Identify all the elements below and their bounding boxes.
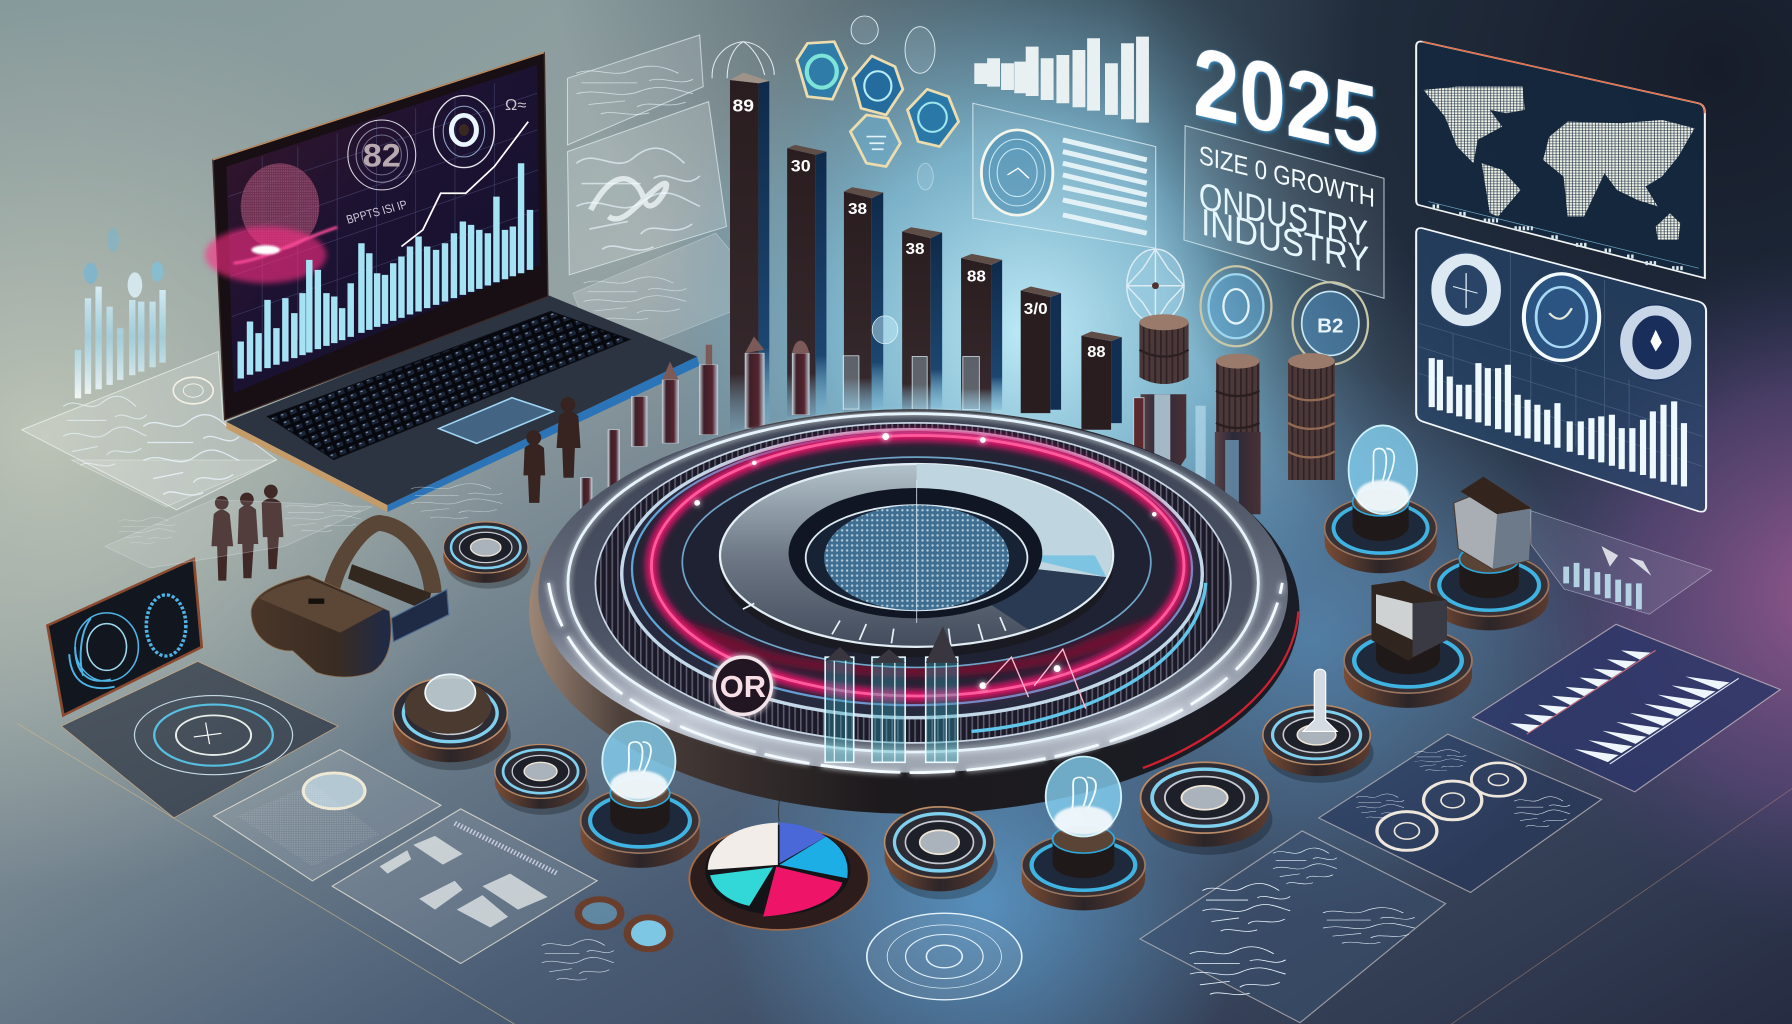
pie chart <box>689 786 869 930</box>
glass legend panel <box>973 103 1156 248</box>
handwritten note <box>542 940 614 980</box>
caption line 2: ONDUSTRY <box>1199 174 1368 256</box>
laptop dial number: 82 <box>363 139 401 174</box>
extra vials by the people <box>581 430 619 533</box>
rim highlights <box>549 583 1282 773</box>
bar 6 <box>1021 287 1061 413</box>
spiked chart sheet <box>1473 624 1780 792</box>
pie slice pink <box>763 867 842 917</box>
donut 2 <box>1524 274 1599 360</box>
mini bar chart top <box>981 37 1142 123</box>
rear stacks and dials <box>1127 249 1368 514</box>
dashboard panel <box>1416 228 1706 512</box>
disc tick marks <box>743 603 1006 646</box>
bar 4: 38 <box>905 239 925 258</box>
pie slice teal <box>710 867 773 906</box>
VR headset <box>251 523 449 677</box>
sketch sheet <box>1140 831 1446 1023</box>
globe pedestal centre <box>1022 757 1145 910</box>
pie slice cyan <box>779 837 848 878</box>
caption panel <box>1184 126 1384 298</box>
red base edge <box>1143 611 1298 768</box>
bar 3: 38 <box>848 199 867 218</box>
dashboard bars <box>1432 358 1684 486</box>
box pedestal lower <box>1344 581 1472 708</box>
disc light sector <box>917 464 1112 577</box>
pie slice blue <box>779 823 826 863</box>
platform base <box>529 409 1299 814</box>
donut 1 <box>1431 252 1501 328</box>
coin icon right 1 <box>1141 762 1272 855</box>
hexagon badge 4 <box>850 115 900 167</box>
coin stack 3 <box>1288 353 1335 480</box>
caption line 3: INDUSTRY <box>1201 201 1369 282</box>
grey disc side <box>720 474 1113 657</box>
lens rings <box>578 899 670 949</box>
laptop logo: Ω≈ <box>505 97 527 114</box>
floor sheets left <box>71 460 614 980</box>
pink neon ring <box>651 435 1184 696</box>
bar 7: 88 <box>1087 345 1106 361</box>
mid track <box>632 433 1192 705</box>
touchpad <box>439 398 553 443</box>
rings sheet <box>1319 734 1602 892</box>
donut 3 <box>1620 304 1692 381</box>
sheet 3 <box>332 809 597 964</box>
center dark ring <box>789 488 1042 618</box>
globe pedestal left <box>581 721 699 868</box>
small vials <box>631 316 979 446</box>
inner track <box>622 430 1202 718</box>
continents <box>1424 87 1695 240</box>
keyboard <box>267 312 630 459</box>
glass rim line <box>568 414 1258 752</box>
laptop dial 1 <box>348 120 416 190</box>
hexagon badge 2 <box>853 56 903 115</box>
bar 5 <box>961 254 1002 413</box>
wire dome <box>712 42 774 78</box>
hexagon badge 3 <box>908 89 959 147</box>
year heading: 2025 <box>1193 26 1378 177</box>
red lower wedge <box>674 617 1154 677</box>
front glass bars <box>825 626 958 762</box>
bar 1: 89 <box>733 95 754 115</box>
people near platform <box>523 397 581 503</box>
bar 2 <box>787 145 826 416</box>
left glass data sheet <box>22 352 277 510</box>
textured band <box>595 423 1231 743</box>
coin icon with glass <box>393 674 511 770</box>
floor sheets right <box>1140 511 1780 1023</box>
people left of laptop <box>211 485 283 581</box>
grey disc top <box>720 464 1113 647</box>
coin icon centre <box>885 807 998 899</box>
glass icons <box>851 16 935 190</box>
coin icon top left <box>443 522 531 589</box>
OR badge <box>714 657 771 714</box>
cyan rim arc <box>971 583 1206 731</box>
bar 7 <box>1081 331 1122 430</box>
hexagon badge 1 <box>797 42 847 99</box>
tablet sheet rings <box>134 696 293 775</box>
sheet top left <box>71 460 502 568</box>
back bar chart <box>631 16 1156 446</box>
bar 1 <box>730 73 769 430</box>
world map panel <box>1416 42 1705 278</box>
laptop bar chart <box>241 163 530 378</box>
inner dark ring <box>682 457 1151 667</box>
sheet 2 <box>214 750 441 881</box>
coin icon small <box>495 745 589 815</box>
glass data panels behind the bars <box>568 35 769 363</box>
ring dial 2: B2 <box>1317 315 1343 338</box>
dotted sphere <box>824 480 1009 623</box>
OR badge: OR <box>720 669 766 704</box>
coin icon right 2 <box>1263 669 1374 783</box>
glass target <box>867 913 1022 1000</box>
bar 6: 3/0 <box>1024 299 1048 318</box>
disc blue sector <box>917 555 1106 630</box>
laptop dial 2 <box>434 96 494 168</box>
bar 3 <box>844 187 883 413</box>
wireframe dial <box>1127 249 1184 343</box>
ring dial 2 <box>1293 282 1368 365</box>
center white ring <box>806 505 1027 610</box>
spark lines <box>985 649 1086 709</box>
laptop base <box>226 295 699 512</box>
coin stack 1 <box>1134 314 1206 486</box>
silver rim <box>538 411 1288 773</box>
globe pedestal upper right <box>1325 425 1437 573</box>
box pedestal upper <box>1430 477 1549 630</box>
pie slice white <box>708 823 778 870</box>
bar 2: 30 <box>791 156 811 175</box>
laptop screen <box>205 53 548 420</box>
ring dial 1 <box>1201 266 1271 346</box>
bar 5: 88 <box>967 267 986 285</box>
sparkles <box>694 433 1157 689</box>
left holographic mini bar chart <box>78 228 163 398</box>
dashboard grid <box>1418 253 1703 466</box>
caption line 1: SIZE 0 GROWTH <box>1199 140 1375 213</box>
tablet <box>47 559 338 818</box>
laptop <box>205 53 699 512</box>
central platform <box>529 409 1299 814</box>
small sheet <box>1531 511 1712 614</box>
coin stack 2 <box>1215 354 1261 514</box>
laptop caption: BPPTS ISI IP <box>345 198 409 227</box>
bar 4 <box>902 227 942 413</box>
map axis marks <box>1433 207 1684 268</box>
